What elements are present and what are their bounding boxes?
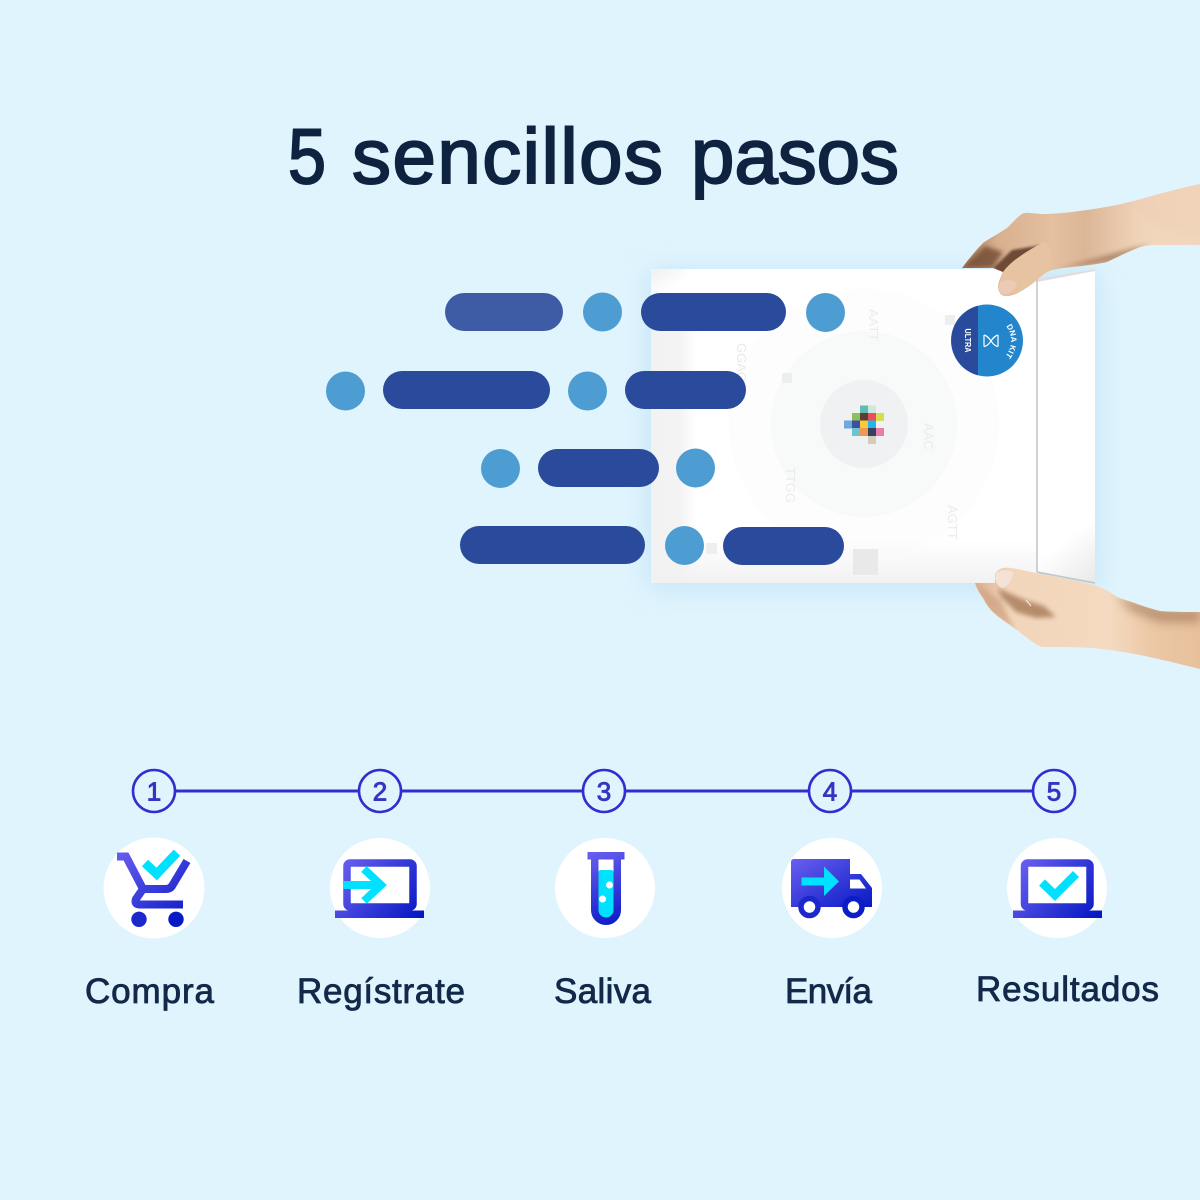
icon: laptop with check: [1007, 838, 1107, 938]
panel: DNA kit envelope: GGAC: [734, 343, 749, 381]
icon: laptop with arrow: [330, 838, 430, 938]
icon: shopping cart with check: [104, 838, 204, 938]
icon: delivery truck: [782, 838, 882, 938]
title: sencillos: [352, 112, 663, 200]
step number 1: 1: [147, 776, 161, 806]
title: [288, 112, 899, 200]
label: Envía: Envía: [785, 972, 873, 1011]
step number 2: 2: [373, 776, 387, 806]
panel: DNA kit envelope: AATT: [866, 309, 881, 341]
image: upper hand holding envelope: [955, 180, 1200, 300]
label: Saliva: Saliva: [554, 972, 652, 1011]
image: lower hand holding envelope: [975, 568, 1200, 669]
step number 3: 3: [597, 776, 611, 806]
title: pasos: [691, 112, 899, 200]
badge: DNA kit sticker: DNA KIT: [1006, 324, 1017, 360]
label: Resultados: Resultados: [976, 970, 1159, 1009]
icon: colored pixel logo: [844, 406, 884, 444]
panel: DNA kit envelope: AAC: [921, 423, 936, 450]
step number 3: [583, 770, 625, 812]
step number 2: [359, 770, 401, 812]
badge: DNA kit sticker: [951, 304, 1023, 376]
panel: DNA kit envelope: AGTT: [945, 505, 960, 540]
badge: DNA kit sticker: ULTRA: [963, 328, 973, 352]
label: Compra: Compra: [85, 972, 215, 1011]
label: Regístrate: Regístrate: [297, 972, 465, 1011]
timeline: numbered steps: [133, 770, 1075, 812]
step number 5: [1033, 770, 1075, 812]
panel: DNA kit envelope: [648, 269, 1098, 588]
panel: DNA kit envelope: TTGG: [783, 467, 798, 503]
step number 4: 4: [823, 776, 837, 806]
panel: data bars and dots: [326, 292, 845, 565]
icon: test tube: [555, 838, 655, 938]
step number 5: 5: [1047, 776, 1061, 806]
step number 1: [133, 770, 175, 812]
step number 4: [809, 770, 851, 812]
title: 5: [288, 112, 326, 200]
infographic canvas: [86, 126, 1200, 1011]
